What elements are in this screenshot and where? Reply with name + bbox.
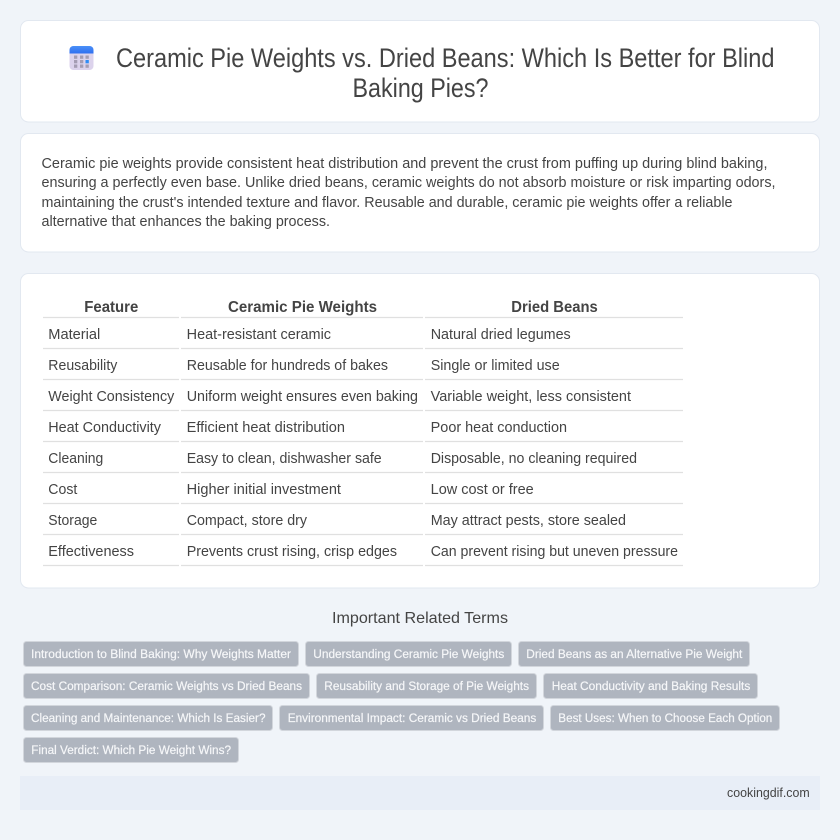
row: storage: [48, 513, 626, 529]
table header row: [84, 299, 598, 316]
footer: cookingdif.com: [727, 785, 810, 800]
row: effectiveness: Effectiveness: [48, 544, 134, 560]
row: weight consistency: Variable weight, less consistent: [431, 389, 631, 405]
row: effectiveness: Can prevent rising but uneven pressure: [431, 544, 678, 560]
related term tags: [24, 642, 780, 762]
intro paragraph: alternative that enhances the baking process.: [42, 214, 330, 230]
intro paragraph: [42, 156, 776, 230]
row: heat conductivity: Poor heat conduction: [431, 420, 567, 436]
related term tags: Understanding Ceramic Pie Weights: [313, 647, 504, 661]
intro paragraph: maintaining the crust's intended texture and flavor. Reusable and durable, ceramic pie weights offer a reliable: [42, 195, 732, 211]
panel: introduction: [20, 134, 820, 252]
row: weight consistency: Uniform weight ensures even baking: [187, 389, 418, 405]
row: cost: Higher initial investment: [187, 482, 341, 498]
row: heat conductivity: Heat Conductivity: [48, 420, 162, 436]
panel: comparison table: [20, 274, 820, 588]
row: weight consistency: Weight Consistency: [48, 389, 175, 405]
row: material: Natural dried legumes: [431, 327, 571, 343]
row: effectiveness: [48, 544, 678, 560]
table header row: Feature: [84, 299, 138, 316]
row: storage: May attract pests, store sealed: [431, 513, 626, 529]
title: [116, 43, 774, 103]
row: cleaning: Cleaning: [48, 451, 103, 467]
row: heat conductivity: [48, 420, 567, 436]
title: Baking Pies?: [352, 73, 488, 103]
related term tags: Environmental Impact: Ceramic vs Dried Beans: [288, 711, 536, 725]
row: heat conductivity: Efficient heat distribution: [187, 420, 345, 436]
row: effectiveness: Prevents crust rising, crisp edges: [187, 544, 397, 560]
related term tags: Cost Comparison: Ceramic Weights vs Dried Beans: [31, 679, 302, 693]
panel: header: [20, 20, 820, 122]
related term tags: Reusability and Storage of Pie Weights: [324, 679, 529, 693]
row: reusability: Reusable for hundreds of bakes: [187, 358, 388, 374]
table rules: [43, 318, 683, 566]
related term tags: Final Verdict: Which Pie Weight Wins?: [31, 743, 231, 757]
row: reusability: [48, 358, 560, 374]
row: cost: [48, 482, 534, 498]
related term tags: Best Uses: When to Choose Each Option: [558, 711, 772, 725]
row: reusability: Single or limited use: [431, 358, 560, 374]
row: cleaning: [48, 451, 637, 467]
row: storage: Compact, store dry: [187, 513, 308, 529]
row: cost: Cost: [48, 482, 77, 498]
related term tags: Introduction to Blind Baking: Why Weights Matter: [31, 647, 291, 661]
row: reusability: Reusability: [48, 358, 118, 374]
row: material: Heat-resistant ceramic: [187, 327, 331, 343]
intro paragraph: Ceramic pie weights provide consistent heat distribution and prevent the crust from puffing up during blind baking,: [42, 156, 768, 172]
row: material: [48, 327, 571, 343]
related term tags: Heat Conductivity and Baking Results: [552, 679, 750, 693]
row: weight consistency: [48, 389, 631, 405]
footer: [20, 776, 820, 810]
related term tags: Cleaning and Maintenance: Which Is Easier?: [31, 711, 266, 725]
icon: calendar grid: [70, 46, 94, 70]
row: cleaning: Easy to clean, dishwasher safe: [187, 451, 382, 467]
intro paragraph: ensuring a perfectly even base. Unlike dried beans, ceramic weights do not absorb moisture or risk imparting odors,: [42, 175, 776, 191]
table header row: Ceramic Pie Weights: [228, 299, 377, 316]
heading: important related terms: Important Related Terms: [332, 610, 508, 627]
related term tags: Dried Beans as an Alternative Pie Weight: [526, 647, 743, 661]
row: cost: Low cost or free: [431, 482, 534, 498]
row: storage: Storage: [48, 513, 97, 529]
title: Ceramic Pie Weights vs. Dried Beans: Which Is Better for Blind: [116, 43, 774, 73]
table header row: Dried Beans: [511, 299, 598, 316]
row: material: Material: [48, 327, 100, 343]
row: cleaning: Disposable, no cleaning required: [431, 451, 637, 467]
